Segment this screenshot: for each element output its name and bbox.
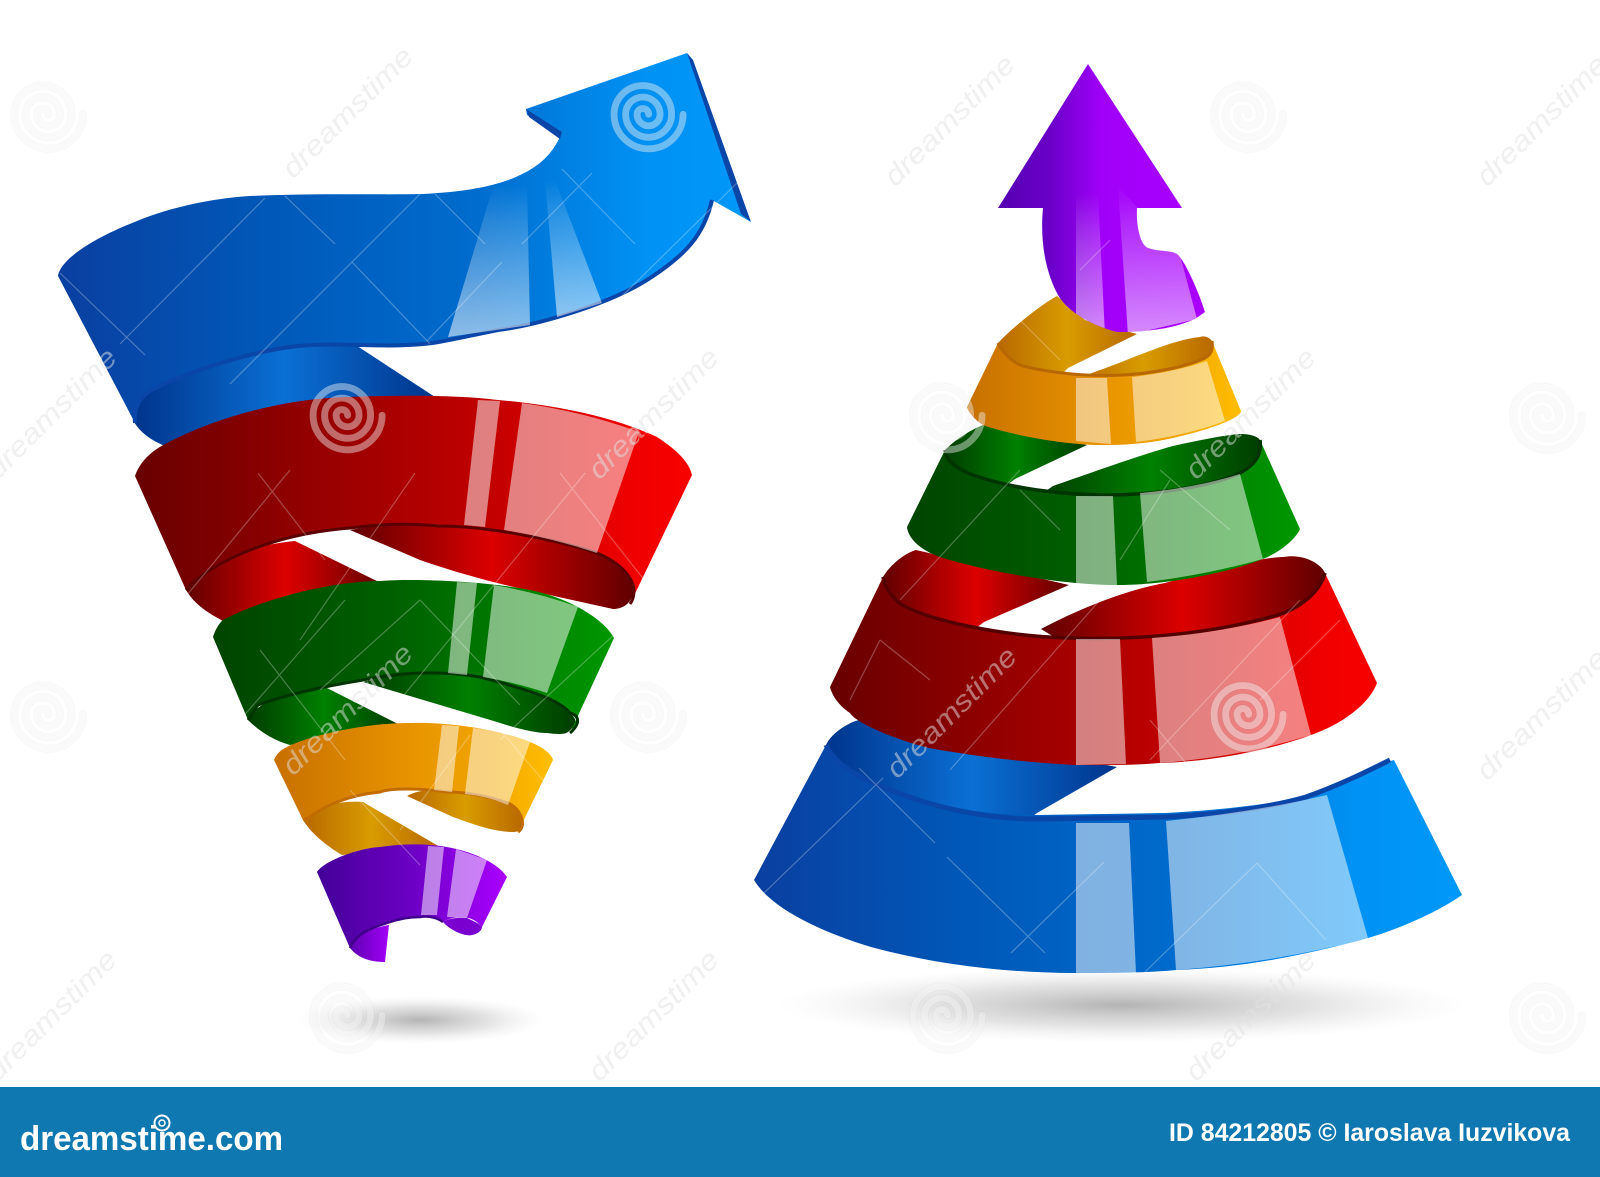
footer logo: dreamstime.com: dreamstime.com	[20, 1120, 283, 1158]
ribbon: blue base	[754, 720, 1462, 973]
ribbon: purple tail	[317, 844, 507, 962]
watermark: dreamstime text: dreamstime	[276, 41, 419, 184]
ribbon: blue arrow band	[58, 53, 751, 446]
ribbon: amber band	[274, 723, 553, 855]
ribbon: green band	[907, 425, 1300, 585]
footer bar	[0, 1087, 1600, 1177]
ribbon: green band	[213, 580, 614, 745]
watermark: dreamstime text: dreamstime	[276, 638, 419, 781]
shadow: under funnel	[295, 996, 545, 1044]
ribbon: amber band	[967, 296, 1241, 445]
footer credit: image id and author: ID 84212805 © Iaroslava Iuzvikova	[1169, 1119, 1571, 1147]
watermark: dreamstime text: dreamstime	[1179, 342, 1322, 485]
watermark: dreamstime text: dreamstime	[1179, 944, 1322, 1087]
ribbon: red band	[135, 396, 692, 622]
funnel: inverted spiral ribbon with arrow	[58, 53, 751, 962]
watermark: dreamstime text: dreamstime	[582, 944, 725, 1087]
watermark: dreamstime text: dreamstime	[582, 342, 725, 485]
watermark: dreamstime text: dreamstime	[1470, 49, 1600, 192]
watermark: diagonal lines	[60, 169, 1340, 972]
watermark: dreamstime text: dreamstime	[878, 49, 1021, 192]
watermark: dreamstime text: dreamstime	[1470, 643, 1600, 786]
watermark: dreamstime text: dreamstime	[880, 641, 1023, 784]
shadow: under pyramid	[777, 967, 1467, 1043]
ribbon: red band	[830, 550, 1377, 765]
pyramid: spiral ribbon with arrow	[754, 64, 1462, 973]
arrow: purple up arrow	[998, 64, 1205, 335]
